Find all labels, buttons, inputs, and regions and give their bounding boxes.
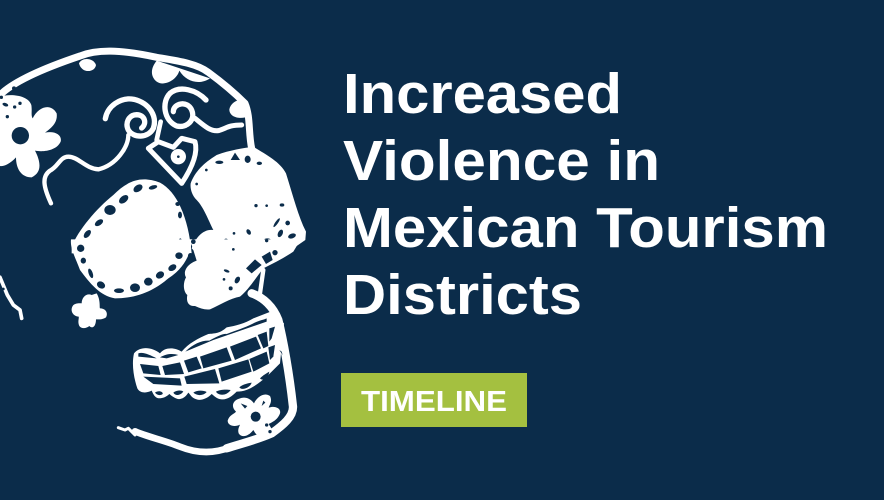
jaw line bbox=[227, 293, 293, 448]
lower right flower bbox=[228, 394, 280, 437]
lower right flower petals marks bbox=[241, 401, 272, 433]
jaw tip bbox=[118, 428, 135, 435]
skull lower part: nose, jaw, teeth, flowers bbox=[0, 239, 298, 452]
nose bridge beads bbox=[184, 239, 298, 309]
right vine bbox=[195, 118, 242, 131]
skull upper part: cranium, flower, swirls, eye socket bbox=[0, 51, 306, 253]
left flower bbox=[0, 95, 61, 177]
upper gum scallops bbox=[138, 318, 283, 358]
title line 4: Districts bbox=[343, 263, 582, 327]
heart dot centre bbox=[177, 155, 180, 158]
back of skull fragment bbox=[0, 277, 22, 318]
title line 3: Mexican Tourism bbox=[343, 196, 828, 260]
left swirl and vine bbox=[105, 99, 154, 136]
right swirl and vine bbox=[165, 89, 206, 126]
lower right flower centre bbox=[251, 412, 261, 422]
right eye socket and nose bbox=[191, 147, 306, 253]
badge background bbox=[341, 373, 527, 427]
nose holes bbox=[188, 239, 278, 290]
title line 1: Increased bbox=[343, 62, 622, 126]
lower scallop holes bbox=[155, 372, 269, 395]
badge label: TIMELINE bbox=[361, 386, 507, 418]
left eye socket bbox=[72, 179, 192, 253]
cranium decorative bumps bbox=[79, 59, 250, 118]
left flower speckles bbox=[0, 86, 22, 118]
icon: sugar skull illustration bbox=[0, 51, 306, 452]
timeline badge bbox=[341, 373, 527, 427]
small flower under left eye bbox=[72, 293, 107, 328]
title bbox=[343, 62, 828, 327]
vine bbox=[44, 135, 128, 203]
right eye socket rim holes bbox=[195, 153, 297, 243]
heart connector bbox=[157, 122, 161, 140]
heart bbox=[148, 138, 196, 183]
heart dot bbox=[172, 151, 184, 163]
teeth block bbox=[133, 312, 284, 400]
left eye socket lower bbox=[71, 239, 192, 298]
fragment holes bbox=[2, 288, 5, 290]
left eye socket lower rim holes bbox=[77, 245, 183, 293]
left eye socket rim holes bbox=[82, 183, 182, 245]
teeth cells bbox=[140, 327, 275, 386]
cranium outline bbox=[0, 51, 252, 148]
chin line bbox=[135, 431, 230, 452]
left flower centre bbox=[12, 127, 29, 144]
jaw strand from nose bbox=[260, 270, 263, 293]
title line 2: Violence in bbox=[343, 129, 660, 193]
